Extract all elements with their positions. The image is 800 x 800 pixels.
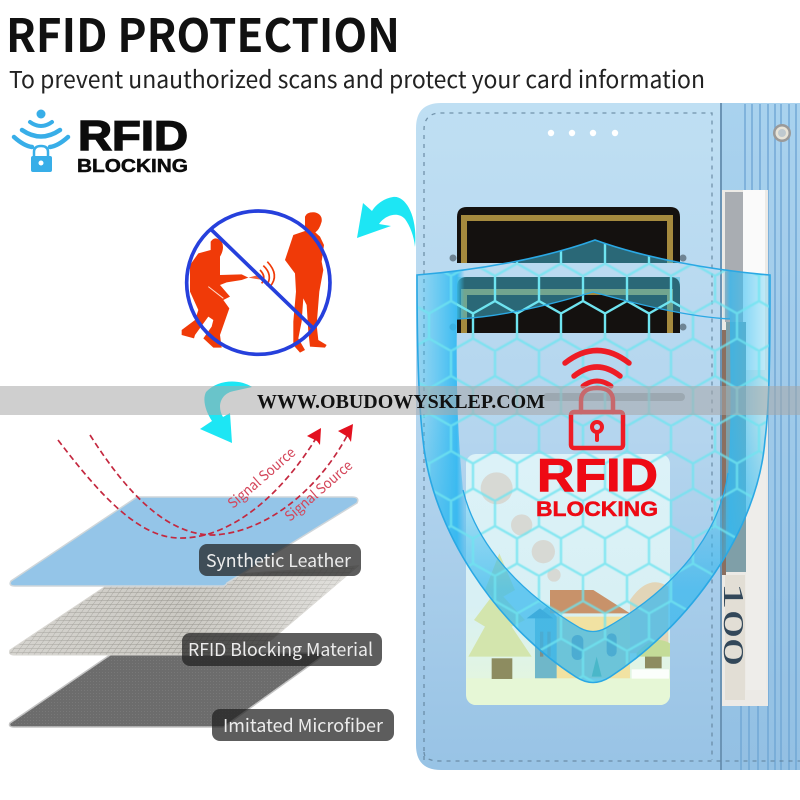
layer: RFID blocking mesh (10, 566, 358, 655)
wallet front cover (416, 103, 721, 770)
signal source label 2: Signal Source (280, 455, 357, 526)
logo: RFID blocking (14, 110, 188, 176)
subtitle: To prevent unauthorized scans and protect your card information (9, 61, 705, 95)
watermark band (0, 386, 800, 415)
stitching (424, 113, 800, 761)
label: RFID blocking material: RFID Blocking Material (188, 636, 373, 662)
arrowheads (307, 424, 353, 445)
layer: synthetic leather (10, 497, 358, 586)
photo window card (466, 454, 672, 708)
logo: RFID blocking: BLOCKING (77, 156, 188, 176)
slot notches (450, 254, 686, 330)
shield outline (417, 240, 770, 682)
title: RFID PROTECTION (6, 0, 400, 66)
icon: no scanning prohibition sign (182, 211, 330, 354)
wallet photo (416, 103, 800, 770)
red BLOCKING text: BLOCKING (536, 498, 658, 521)
arrow: cyan curved bottom (200, 382, 252, 443)
eyelet (773, 124, 791, 142)
card top (457, 207, 680, 263)
layered materials diagram (10, 424, 394, 741)
strip pleats (741, 104, 796, 770)
card second (457, 277, 680, 333)
banknote: 100 (717, 582, 748, 666)
signal waves (260, 262, 274, 287)
shield inner outline (457, 292, 730, 632)
lower band (417, 240, 770, 682)
side band gradient (417, 240, 770, 682)
signal curves (58, 430, 350, 538)
signal source label 1: Signal Source (223, 442, 300, 513)
band tint over cards (457, 240, 680, 318)
wallet right strip (700, 103, 800, 770)
lower slot (543, 393, 685, 401)
label: imitated microfiber: Imitated Microfiber (223, 712, 384, 738)
icon: blue wifi lock (14, 110, 68, 172)
honeycomb over cards (457, 244, 680, 333)
arrow: cyan curved top (357, 197, 415, 247)
crouching scanner figure (182, 238, 248, 348)
blue circle and slash (187, 211, 330, 354)
red RFID text: RFID (537, 449, 658, 501)
honeycomb soft (417, 240, 770, 682)
shield: RFID honeycomb overlay (417, 240, 770, 682)
label: synthetic leather: Synthetic Leather (206, 547, 352, 573)
banknote (717, 190, 768, 706)
layer: microfiber (10, 653, 327, 727)
icon: red wifi lock (565, 350, 629, 448)
logo: RFID blocking: RFID (78, 112, 188, 159)
standing figure (285, 212, 327, 353)
cover edge shadow (720, 103, 722, 770)
watermark band: WWW.OBUDOWYSKLEP.COM (257, 392, 545, 413)
speaker dots (548, 130, 618, 136)
